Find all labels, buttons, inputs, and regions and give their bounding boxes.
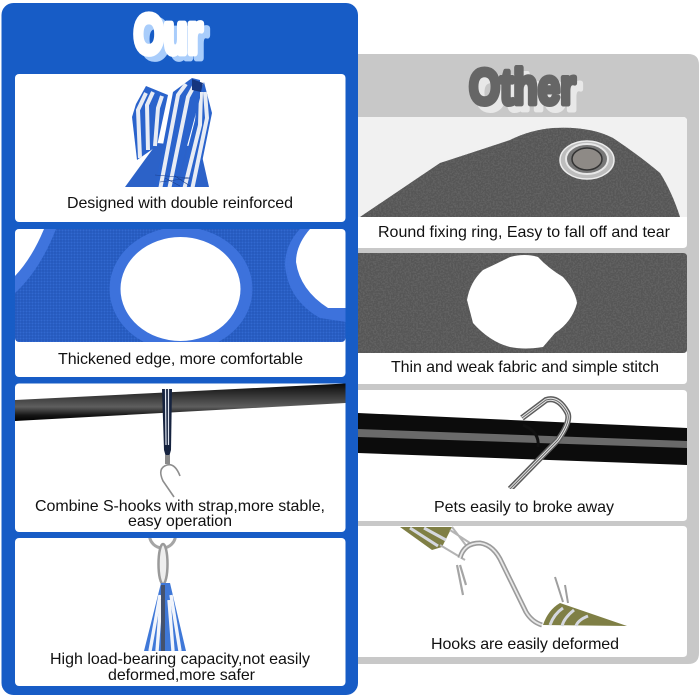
caption: Combine S-hooks with strap,more stable,	[35, 498, 325, 515]
card: thickened edge	[15, 227, 346, 377]
caption: Pets easily to broke away	[434, 499, 614, 516]
card: S-hook with strap	[15, 384, 346, 532]
panel: our product	[2, 3, 358, 695]
heading: Our: Our	[134, 3, 202, 65]
caption	[50, 651, 310, 684]
card: high load-bearing	[15, 522, 346, 686]
heading: Other: Other	[469, 59, 576, 115]
panel: other product	[358, 54, 699, 664]
image: carabiner and striped fabric	[144, 538, 186, 651]
caption: deformed,more safer	[108, 667, 256, 684]
image: bent hook with olive straps	[400, 527, 627, 626]
caption: Thin and weak fabric and simple stitch	[391, 359, 659, 376]
image: black bar	[15, 384, 346, 421]
caption	[35, 498, 325, 530]
caption: Thickened edge, more comfortable	[58, 351, 303, 368]
card: pets break away	[358, 390, 687, 521]
card: thin fabric	[358, 253, 687, 384]
card: fixing ring	[358, 117, 687, 248]
image: striped strap	[125, 78, 212, 190]
image: strap and hook	[161, 389, 180, 497]
image: black bar with S-hook	[358, 399, 687, 489]
heading: Other: Other	[475, 65, 582, 121]
caption: easy operation	[128, 513, 232, 530]
caption: Round fixing ring, Easy to fall off and tear	[378, 224, 671, 241]
card: deformed hooks	[358, 526, 687, 657]
caption: High load-bearing capacity,not easily	[50, 651, 310, 668]
heading: Our: Our	[140, 8, 208, 70]
image: towel with torn hole	[358, 253, 687, 353]
image: towel with grommet	[358, 117, 687, 217]
card: double reinforced strap	[15, 74, 346, 222]
caption: Hooks are easily deformed	[431, 636, 619, 653]
caption: Designed with double reinforced	[67, 195, 293, 212]
image: blue mesh with holes	[15, 227, 346, 351]
